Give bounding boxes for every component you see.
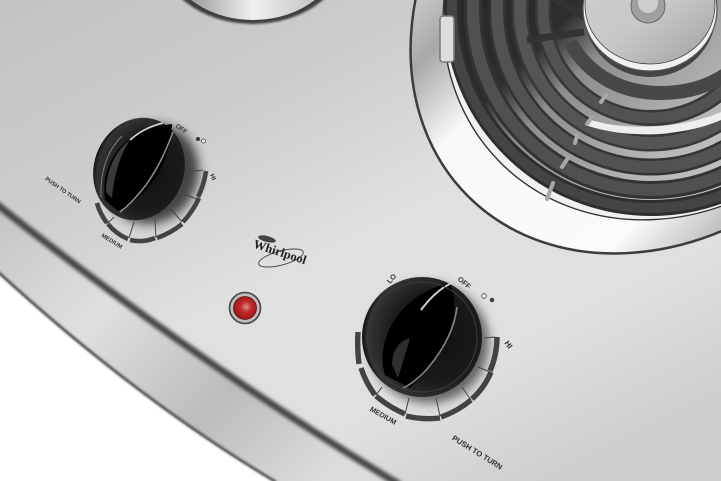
label: off: OFF [456, 274, 473, 291]
knob highlight: top stripe [130, 123, 163, 140]
logo wordmark: Whirlpool [252, 237, 309, 267]
label: hi: HI [208, 173, 217, 182]
white background outside the cooktop edge [0, 271, 276, 481]
coil: third ring [520, 0, 721, 143]
logo swoosh [257, 245, 305, 271]
knob reflection: grip pocket [392, 338, 410, 378]
label: push to turn: PUSH TO TURN [44, 176, 81, 205]
burner trim ring [306, 0, 721, 358]
dial ticks [376, 337, 495, 416]
dial scale [97, 171, 206, 241]
coil supports [547, 95, 606, 199]
knob shadow [89, 108, 215, 240]
coil: fourth ring [497, 0, 721, 167]
coil clip: left [440, 16, 454, 62]
indicator light [230, 292, 260, 324]
centre cap [583, 0, 717, 77]
coil: fifth ring [473, 0, 721, 190]
right burner [306, 0, 721, 358]
knob highlight: ridge [403, 307, 457, 388]
bevel crease shadow [0, 203, 400, 481]
knob reflection: left crescent [106, 140, 130, 198]
cap centre post [631, 0, 665, 23]
top burner trim [157, 0, 349, 24]
cooktop edge shadow [0, 271, 276, 481]
whirlpool logo [252, 234, 309, 271]
knob highlight: ridge [120, 132, 173, 212]
front bevel band [0, 203, 400, 481]
knob body [79, 105, 199, 233]
knob highlight: top stripe [421, 283, 452, 310]
bright reflections between inner coils [586, 112, 721, 134]
support struts [527, 0, 586, 40]
label: push to turn: PUSH TO TURN [450, 434, 504, 472]
dial scale [358, 332, 497, 419]
label: medium: MEDIUM [368, 404, 398, 427]
knob crest [104, 124, 172, 211]
knob shadow [369, 283, 489, 403]
label: lo: LO [385, 272, 399, 285]
burner bowl [444, 0, 721, 210]
coil: outermost [452, 0, 721, 208]
label: hi: HI [502, 339, 514, 350]
label: off: OFF [174, 123, 188, 136]
indicator dots [482, 294, 494, 302]
coil: inner ring [570, 42, 721, 93]
right control knob [358, 272, 514, 472]
left control knob [44, 105, 217, 251]
indicator dots [196, 137, 206, 143]
knob highlight: left rim [101, 136, 122, 197]
logo emblem [258, 234, 276, 244]
knob crest [383, 283, 454, 388]
knob rim [367, 282, 477, 392]
inner trim line [351, 0, 721, 312]
dial ticks [107, 170, 203, 238]
knob body [362, 277, 482, 397]
label: medium: MEDIUM [100, 233, 123, 251]
coil: second ring [543, 0, 721, 118]
